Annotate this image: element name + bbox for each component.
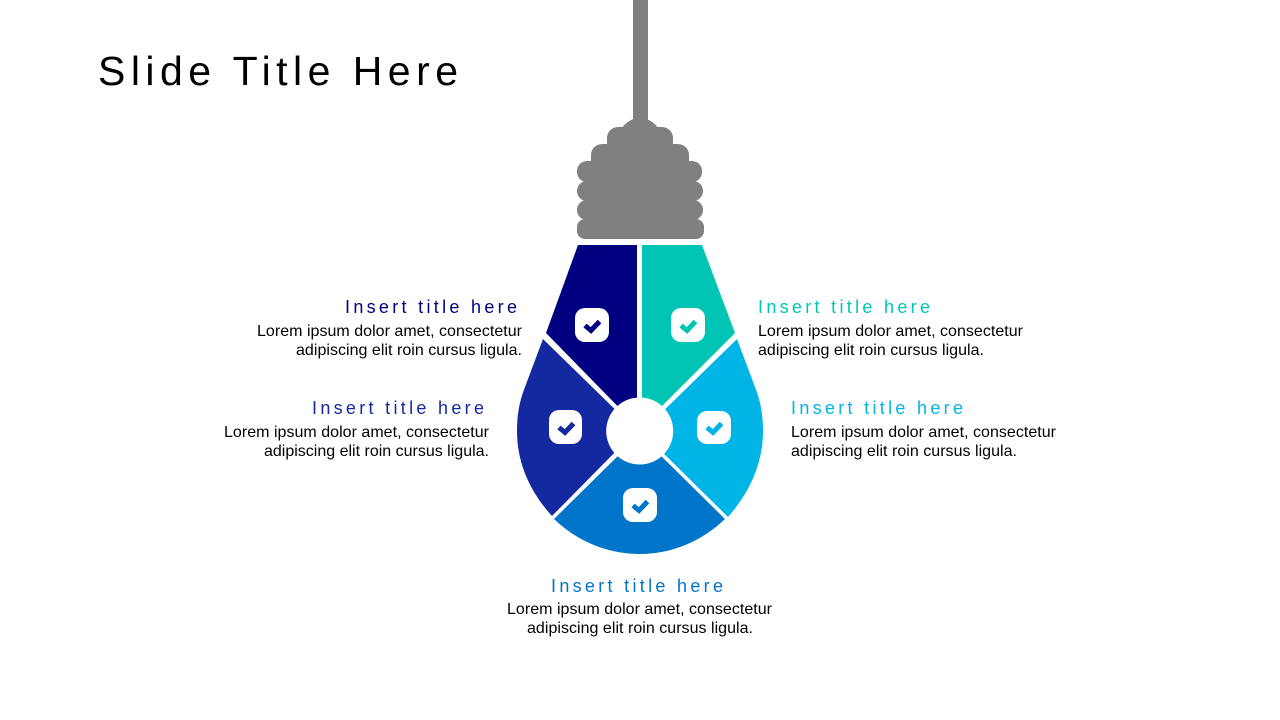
text block: mid blue: Insert title here: [551, 576, 726, 596]
segment: teal: [642, 245, 735, 426]
bulb cord and socket: [577, 0, 704, 239]
text block: mid blue: [507, 576, 773, 637]
text block: navy: Lorem ipsum dolor amet, consectetur: [257, 323, 523, 340]
text block: mid blue: adipiscing elit roin cursus ligula.: [527, 620, 753, 637]
text block: royal blue: Insert title here: [312, 398, 487, 418]
center circle: [606, 398, 673, 464]
icon: teal check: [671, 308, 705, 342]
text block: royal blue: Lorem ipsum dolor amet, consectetur: [224, 424, 490, 441]
text block: navy: adipiscing elit roin cursus ligula.: [296, 342, 522, 359]
text block: royal blue: adipiscing elit roin cursus ligula.: [264, 443, 489, 460]
text block: teal: [758, 297, 1024, 359]
text block: sky blue: adipiscing elit roin cursus ligula.: [791, 443, 1017, 460]
text block: teal: adipiscing elit roin cursus ligula.: [758, 342, 984, 359]
text block: sky blue: [791, 398, 1057, 460]
text block: navy: Insert title here: [345, 297, 520, 317]
icon: light bulb: [517, 0, 763, 554]
segment: royal blue: [517, 339, 630, 516]
segment: sky blue: [650, 339, 763, 517]
text block: mid blue: Lorem ipsum dolor amet, consectetur: [507, 601, 773, 618]
segment: navy: [546, 245, 637, 426]
icon: navy check: [575, 308, 609, 342]
icon: sky blue check: [697, 411, 731, 444]
text block: navy: [257, 297, 523, 359]
text block: teal: Insert title here: [758, 297, 933, 317]
icon: royal blue check: [549, 410, 582, 444]
text block: sky blue: Insert title here: [791, 398, 966, 418]
text block: teal: Lorem ipsum dolor amet, consectetur: [758, 323, 1024, 340]
segment: mid blue: [554, 444, 725, 554]
text block: royal blue: [224, 398, 490, 460]
icon: mid blue check: [623, 488, 657, 522]
text block: sky blue: Lorem ipsum dolor amet, consectetur: [791, 424, 1057, 441]
title: Slide Title Here: [98, 48, 458, 94]
